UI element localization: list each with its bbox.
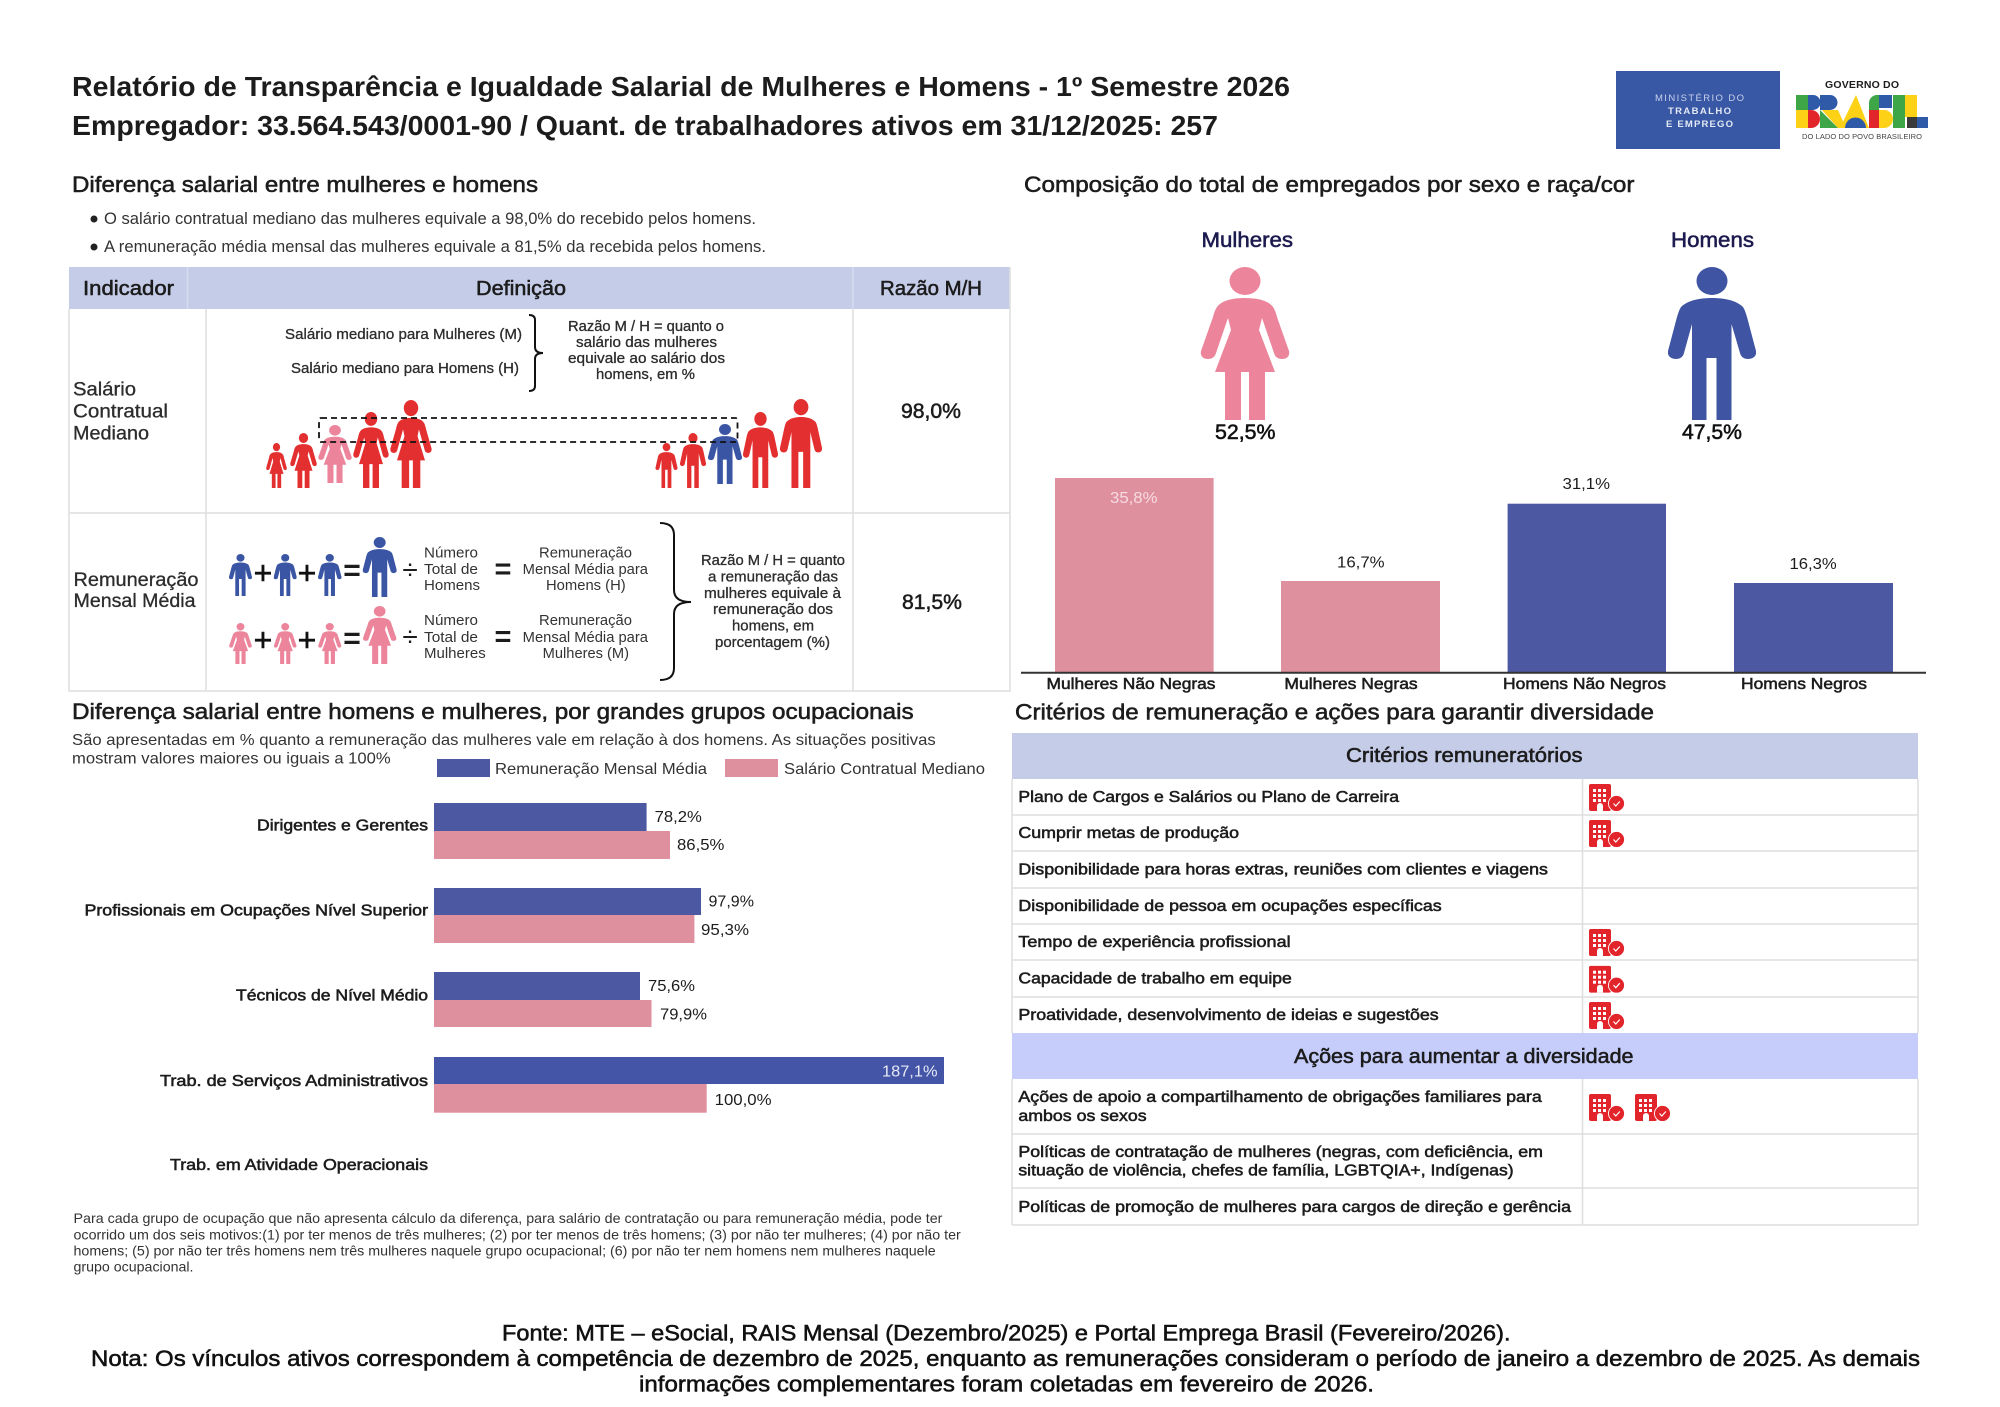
table: indicador definição razão: [69, 267, 1010, 691]
legend: Remuneração Mensal Média: [495, 761, 707, 778]
formula: mulheres: +: [254, 622, 272, 658]
formula: homens: =: [343, 554, 361, 587]
definition text: salário mediano: Salário mediano para Mulheres (M): [285, 327, 522, 343]
table: critérios remuneratórios: Ações para aumentar a diversidade: [1294, 1046, 1634, 1068]
table: critérios remuneratórios: Disponibilidade para horas extras, reuniões com clientes e viagens: [1018, 862, 1548, 879]
explanation: razão M/H salário: [568, 319, 725, 383]
bar chart: grupos: 86,5%: [677, 837, 724, 854]
row label: salário contratual mediano: [73, 380, 168, 444]
formula: mulheres: Mulheres (M): [543, 646, 629, 662]
bullet list: A remuneração média mensal das mulheres equivale a 81,5% da recebida pelos homens.: [104, 238, 766, 256]
icon: man: [1668, 267, 1756, 420]
heading: composição: Composição do total de empregados por sexo e raça/cor: [1024, 172, 1634, 197]
bar chart: grupos: Trab. de Serviços Administrativos: [160, 1073, 428, 1090]
figures: women group: [266, 400, 432, 488]
bar chart: sexo e raça/cor: [1021, 476, 1926, 693]
value: 81,5%: 81,5%: [902, 591, 962, 614]
figures: men group: [655, 399, 822, 488]
bar chart: grupos: Trab. em Atividade Operacionais: [170, 1157, 428, 1174]
formula: homens: =: [495, 554, 511, 586]
bar chart: sexo e raça/cor: Mulheres Negras: [1284, 676, 1418, 693]
brace: [529, 315, 543, 391]
logos: ministério and governo do brasil: GOVERNO DO: [1825, 79, 1899, 91]
bar chart: grupos: 95,3%: [701, 922, 749, 939]
formula: mulheres: Mensal Média para: [523, 630, 649, 646]
explanation: razão M/H salário: homens, em %: [596, 367, 695, 383]
bar chart: grupos: 100,0%: [715, 1092, 772, 1109]
footnote: homens; (5) por não ter três homens nem três mulheres naquele grupo ocupacional; (6) por não ter nem homens nem mulheres naquele: [74, 1242, 936, 1258]
explanation: razão M/H remuneração: porcentagem (%): [715, 635, 830, 651]
row label: salário contratual mediano: Contratual: [73, 402, 168, 422]
explanation: razão M/H remuneração: remuneração dos: [713, 602, 833, 618]
bar chart: sexo e raça/cor: Homens Negros: [1741, 676, 1867, 693]
bar chart: grupos: [84, 803, 944, 1174]
icon: woman: [1201, 267, 1289, 420]
table: critérios remuneratórios: Tempo de experiência profissional: [1018, 934, 1291, 951]
legend: [437, 759, 985, 778]
bar chart: grupos: Dirigentes e Gerentes: [257, 818, 428, 835]
bar chart: grupos: 97,9%: [708, 894, 754, 911]
bar chart: sexo e raça/cor: Mulheres Não Negras: [1046, 676, 1216, 693]
table: critérios remuneratórios: Políticas de contratação de mulheres (negras, com deficiência, em: [1018, 1144, 1543, 1161]
title: Empregador: 33.564.543/0001-90 / Quant. de trabalhadores ativos em 31/12/2025: 257: [72, 110, 1218, 141]
formula: mulheres: +: [298, 622, 316, 658]
bar chart: sexo e raça/cor: 16,7%: [1337, 555, 1385, 572]
formula: homens: Homens: [424, 578, 480, 594]
panel: composição do total de empregados: [1021, 172, 1926, 693]
footnote: ocorrido um dos seis motivos:(1) por ter menos de três mulheres; (2) por ter menos de três homens; (3) por não ter mulheres; (4) por não ter: [74, 1226, 961, 1242]
table: critérios remuneratórios: Disponibilidade de pessoa em ocupações específicas: [1018, 898, 1442, 915]
footnote: grupo ocupacional.: [74, 1258, 194, 1274]
bar chart: sexo e raça/cor: 16,3%: [1790, 556, 1837, 573]
description: São apresentadas em % quanto a remuneração das mulheres vale em relação à dos homens. As situações positivas: [72, 732, 936, 749]
formula: mulheres: Mulheres: [424, 646, 486, 662]
title: [72, 71, 1290, 141]
panel: grupos ocupacionais: [72, 699, 985, 1274]
formula: mulheres: Total de: [424, 630, 478, 646]
row label: remuneração mensal média: Remuneração: [74, 570, 198, 591]
bar chart: sexo e raça/cor: Homens Não Negros: [1503, 676, 1666, 693]
label: homens: Homens: [1671, 229, 1754, 252]
panel: critérios e ações: [1012, 700, 1918, 1225]
table: critérios remuneratórios: Plano de Cargos e Salários ou Plano de Carreira: [1018, 789, 1399, 806]
explanation: razão M/H remuneração: [701, 553, 845, 651]
bar chart: grupos: 75,6%: [648, 978, 695, 995]
table: indicador definição razão: Indicador: [83, 278, 174, 300]
formula: mulheres: Número: [424, 613, 478, 629]
bar chart: sexo e raça/cor: 35,8%: [1110, 490, 1158, 507]
footnote: Para cada grupo de ocupação que não apresenta cálculo da diferença, para salário de contratação ou para remuneração média, pode ter: [74, 1210, 943, 1226]
bar chart: grupos: 187,1%: [882, 1064, 938, 1081]
formula: homens: +: [298, 555, 316, 591]
logos: ministério and governo do brasil: [1616, 71, 1928, 149]
explanation: razão M/H remuneração: mulheres equivale à: [704, 586, 842, 602]
table: indicador definição razão: Razão M/H: [880, 278, 982, 300]
footer: fonte e nota: Nota: Os vínculos ativos correspondem à competência de dezembro de 2025, enquanto as remunerações consideram o período de janeiro a dezembro de 2025. As demais: [91, 1346, 1920, 1371]
explanation: razão M/H remuneração: homens, em: [732, 619, 814, 635]
explanation: razão M/H remuneração: a remuneração das: [708, 570, 838, 586]
table: critérios remuneratórios: Ações de apoio a compartilhamento de obrigações familiares para: [1018, 1089, 1542, 1106]
value: homens 47,5%: 47,5%: [1682, 421, 1742, 444]
formula: homens: [229, 537, 649, 597]
definition text: salário mediano: [285, 327, 522, 377]
table: critérios remuneratórios: Proatividade, desenvolvimento de ideias e sugestões: [1018, 1007, 1439, 1024]
bullet list: [90, 210, 766, 256]
table: critérios remuneratórios: [1012, 733, 1918, 1225]
table: indicador definição razão: Definição: [476, 278, 566, 300]
bar chart: grupos: 79,9%: [660, 1007, 707, 1024]
bullet list: O salário contratual mediano das mulheres equivale a 98,0% do recebido pelos homens.: [104, 210, 756, 228]
explanation: razão M/H salário: equivale ao salário dos: [568, 351, 725, 367]
formula: homens: Total de: [424, 562, 478, 578]
footnote: [74, 1210, 961, 1274]
description: mostram valores maiores ou iguais a 100%: [72, 750, 391, 768]
row label: remuneração mensal média: [74, 570, 198, 612]
heading: critérios: Critérios de remuneração e ações para garantir diversidade: [1015, 700, 1654, 724]
footer: fonte e nota: Fonte: MTE – eSocial, RAIS Mensal (Dezembro/2025) e Portal Emprega Brasil (Fevereiro/2026).: [502, 1321, 1510, 1346]
table: critérios remuneratórios: Critérios remuneratórios: [1346, 745, 1582, 767]
title: Relatório de Transparência e Igualdade Salarial de Mulheres e Homens - 1º Semestre 2026: [72, 71, 1290, 102]
dashed comparison box: [319, 418, 738, 442]
value: 98,0%: 98,0%: [901, 400, 961, 423]
formula: homens: Homens (H): [546, 578, 626, 594]
explanation: razão M/H remuneração: Razão M / H = quanto: [701, 553, 845, 569]
description: [72, 732, 936, 768]
definition text: salário mediano: Salário mediano para Homens (H): [291, 361, 519, 377]
formula: mulheres: =: [343, 622, 361, 655]
big brace: [660, 523, 691, 680]
row label: salário contratual mediano: Salário: [73, 380, 136, 400]
value: mulheres 52,5%: 52,5%: [1215, 421, 1276, 444]
logos: ministério and governo do brasil: DO LADO DO POVO BRASILEIRO: [1802, 132, 1922, 141]
footer: fonte e nota: [91, 1321, 1920, 1397]
formula: mulheres: ÷: [402, 621, 418, 652]
bar chart: grupos: Técnicos de Nível Médio: [236, 988, 428, 1004]
formula: homens: +: [254, 555, 272, 591]
formula: mulheres: [229, 606, 649, 664]
table: critérios remuneratórios: situação de violência, chefes de família, LGBTQIA+, Indígenas): [1018, 1163, 1514, 1180]
legend: Salário Contratual Mediano: [784, 761, 985, 778]
formula: homens: ÷: [402, 554, 418, 585]
formula: homens: Número: [424, 546, 478, 562]
footer: fonte e nota: informações complementares foram coletadas em fevereiro de 2026.: [639, 1372, 1374, 1397]
label: mulheres: Mulheres: [1202, 229, 1293, 252]
explanation: razão M/H salário: Razão M / H = quanto o: [568, 319, 724, 335]
formula: homens: Remuneração: [539, 546, 632, 562]
bar chart: grupos: 78,2%: [655, 809, 702, 826]
panel: diferença salarial: [69, 172, 1010, 691]
bar chart: grupos: Profissionais em Ocupações Nível Superior: [84, 903, 429, 920]
heading: diferença salarial: Diferença salarial entre mulheres e homens: [72, 172, 538, 197]
table: critérios remuneratórios: Cumprir metas de produção: [1018, 825, 1239, 842]
logos: ministério and governo do brasil: MINISTÉRIO DO: [1655, 93, 1744, 104]
table: critérios remuneratórios: Políticas de promoção de mulheres para cargos de direção e gerência: [1018, 1199, 1571, 1216]
table: critérios remuneratórios: Capacidade de trabalho em equipe: [1018, 971, 1292, 988]
formula: homens: Mensal Média para: [523, 562, 649, 578]
formula: mulheres: Remuneração: [539, 613, 632, 629]
row label: remuneração mensal média: Mensal Média: [74, 591, 196, 612]
explanation: razão M/H salário: salário das mulheres: [576, 335, 717, 351]
logos: ministério and governo do brasil: TRABALHO: [1668, 106, 1731, 117]
icons: employer check marks: [1589, 784, 1671, 1122]
table: critérios remuneratórios: ambos os sexos: [1018, 1108, 1147, 1125]
heading: grupos ocupacionais: Diferença salarial entre homens e mulheres, por grandes grupos ocupacionais: [72, 699, 914, 724]
bar chart: sexo e raça/cor: 31,1%: [1562, 476, 1610, 493]
row label: salário contratual mediano: Mediano: [73, 424, 149, 444]
formula: mulheres: =: [495, 621, 511, 653]
logos: ministério and governo do brasil: E EMPREGO: [1666, 119, 1733, 130]
